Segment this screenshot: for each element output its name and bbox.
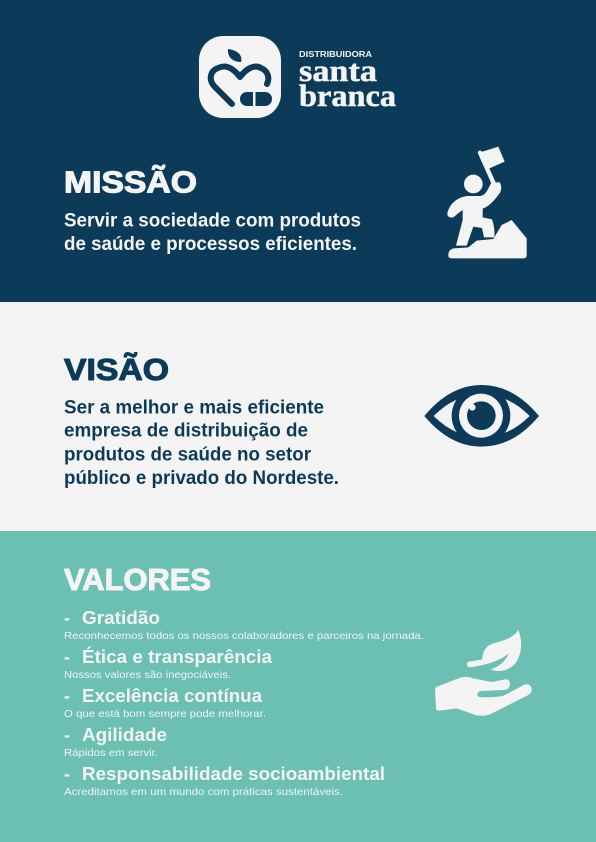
- value: gratidão: -: [64, 608, 70, 628]
- value: agilidade: -: [64, 725, 70, 745]
- value: excelência contínua: [64, 686, 266, 720]
- value: gratidão: Reconhecemos todos os nossos colaboradores e parceiros na jornada.: [64, 630, 424, 642]
- text: visão description: [64, 398, 339, 489]
- logo: [199, 36, 397, 118]
- text: missão description: Servir a sociedade com produtos: [64, 210, 361, 232]
- text: visão description: público e privado do Nordeste.: [64, 468, 339, 489]
- panel: missão: [0, 0, 596, 302]
- value: excelência contínua: Excelência contínua: [82, 686, 263, 706]
- value: ética e transparência: -: [64, 647, 70, 667]
- text: missão description: de saúde e processos eficientes.: [64, 234, 357, 255]
- logo text: santa: [299, 53, 378, 88]
- value: responsabilidade socioambiental: Acreditamos em um mundo com práticas sustentáveis.: [64, 786, 343, 798]
- icon: eye: [424, 385, 539, 447]
- value: excelência contínua: -: [64, 686, 70, 706]
- value: gratidão: Gratidão: [82, 608, 160, 628]
- value: ética e transparência: [64, 646, 273, 681]
- text: visão description: Ser a melhor e mais eficiente: [64, 398, 324, 418]
- text: visão description: empresa de distribuição de: [64, 420, 308, 442]
- heading: missão: MISSÃO: [64, 164, 197, 200]
- icon: logo apple heart with pill: [199, 36, 281, 118]
- heading: valores: VALORES: [64, 562, 211, 597]
- text: visão description: produtos de saúde no setor: [64, 444, 312, 466]
- value: responsabilidade socioambiental: -: [64, 764, 70, 784]
- value: agilidade: Agilidade: [82, 725, 167, 745]
- value: ética e transparência: Ética e transparência: [82, 646, 273, 667]
- value: responsabilidade socioambiental: Responsabilidade socioambiental: [82, 764, 385, 784]
- logo text: branca: [299, 78, 397, 113]
- value: agilidade: [64, 725, 167, 759]
- panel: visão: [0, 302, 596, 531]
- value: agilidade: Rápidos em servir.: [64, 747, 158, 759]
- panel: valores: [0, 531, 596, 842]
- icon: person climbing with flag: [447, 147, 527, 258]
- value: gratidão: [64, 608, 424, 642]
- logo text: DISTRIBUIDORA: [299, 50, 372, 59]
- value: ética e transparência: Nossos valores são inegociáveis.: [64, 669, 231, 681]
- icon: hand holding leaf: [435, 630, 532, 716]
- value: excelência contínua: O que está bom sempre pode melhorar.: [64, 708, 266, 720]
- value: responsabilidade socioambiental: [64, 764, 385, 798]
- logo text: [299, 50, 397, 113]
- heading: visão: VISÃO: [64, 352, 169, 387]
- text: missão description: [64, 210, 361, 255]
